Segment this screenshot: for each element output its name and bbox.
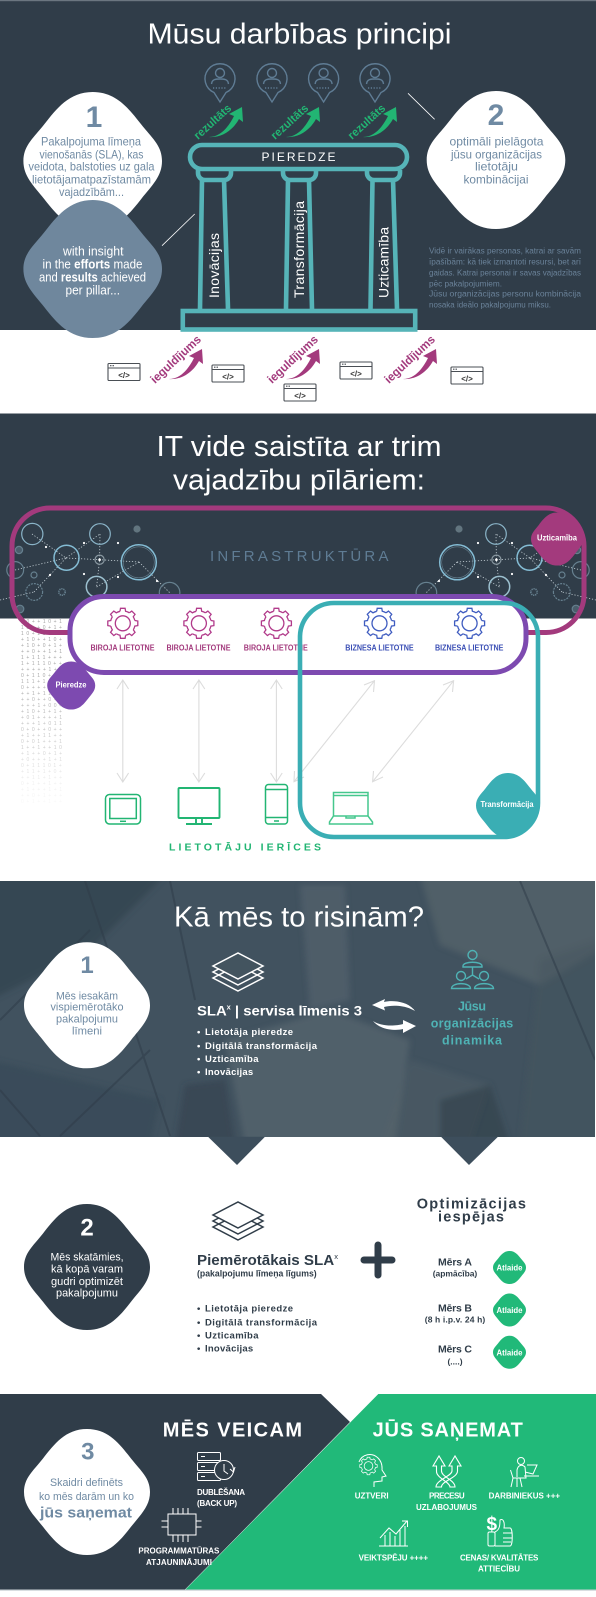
icon: thumbs up and dollar: $ bbox=[486, 1514, 498, 1535]
measures list bbox=[425, 1257, 485, 1366]
icons: code windows: </> bbox=[294, 392, 306, 400]
list: service level: Uzticamība bbox=[205, 1054, 259, 1065]
badge: Transformācija: Transformācija bbox=[480, 800, 534, 809]
icons: code windows: </> bbox=[461, 374, 473, 384]
binary digits: 0 + + + + 1 + + bbox=[21, 685, 63, 691]
measures list: (....) bbox=[447, 1356, 463, 1366]
icon: thumbs up and dollar bbox=[486, 1514, 512, 1546]
gear icons and labels: BIROJA LIETOTNE bbox=[244, 644, 308, 653]
capitals bbox=[198, 170, 400, 180]
discount badges: Atlaide bbox=[496, 1306, 523, 1315]
list: best-fit SLA: Lietotāja pieredze bbox=[205, 1304, 294, 1315]
binary digits: 1 + 1 1 1 0 + + bbox=[21, 661, 62, 667]
investment arrows: ieguldījums bbox=[147, 332, 204, 386]
text block: personas: Jūsu organizācijas personu kombinācija bbox=[429, 289, 582, 298]
title: Mūsu darbības principi: Mūsu darbības principi bbox=[148, 18, 452, 50]
badge: Pieredze bbox=[47, 662, 95, 710]
bubble step 2: 2 bbox=[80, 1215, 94, 1242]
icons: code windows: </> bbox=[118, 371, 130, 380]
icon: layers dark bbox=[213, 1202, 263, 1240]
bubble step 3: ko mēs darām un ko bbox=[39, 1491, 134, 1503]
binary digits: + + 1 + 1 1 + + bbox=[21, 691, 63, 697]
binary digits: 0 + 0 + + 0 + + bbox=[21, 727, 63, 733]
bubble step 1 bbox=[24, 942, 150, 1068]
list: best-fit SLA: Uzticamība bbox=[205, 1331, 259, 1342]
label: process improvements bbox=[416, 1492, 478, 1512]
list: best-fit SLA: • bbox=[197, 1344, 201, 1355]
phone bbox=[266, 784, 288, 824]
heading: MĒS VEICAM: MĒS VEICAM bbox=[163, 1420, 302, 1442]
base bbox=[183, 311, 415, 330]
network decoration left bbox=[0, 523, 180, 613]
bubble: with insight bbox=[23, 200, 162, 338]
binary digits: 1 0 + 1 1 + 1 1 bbox=[21, 631, 62, 637]
label: software updates: PROGRAMMATŪRAS bbox=[138, 1546, 220, 1555]
badge: Transformācija bbox=[476, 773, 540, 838]
label: software updates bbox=[138, 1546, 220, 1567]
list: service level: Digitālā transformācija bbox=[205, 1041, 318, 1052]
bubble: with insight: and results achieved bbox=[39, 271, 146, 285]
list: best-fit SLA: • bbox=[197, 1304, 201, 1315]
frame: transformation bbox=[300, 603, 538, 837]
binary digits: 0 + 1 + + 1 + + bbox=[21, 799, 63, 805]
measures list: Mērs A bbox=[438, 1257, 472, 1269]
bubble: with insight: in the efforts made bbox=[42, 258, 143, 272]
icon: plus bbox=[364, 1245, 392, 1275]
binary digits: + 1 0 + + 1 0 + bbox=[21, 637, 63, 643]
binary digits: 0 + 1 + + 1 + + bbox=[21, 781, 63, 787]
label: employees: DARBINIEKUS +++ bbox=[489, 1492, 560, 1501]
icons: code windows: </> bbox=[350, 370, 362, 378]
badge: Uzticamība bbox=[531, 512, 583, 566]
label: PIEREDZE: PIEREDZE bbox=[262, 150, 336, 164]
white line from pillar bbox=[162, 214, 195, 246]
icon: backup server bbox=[198, 1452, 235, 1480]
binary digits: + 1 + + + 1 + 1 bbox=[21, 787, 63, 793]
temple diagram bbox=[183, 145, 415, 330]
gear icons and labels bbox=[90, 608, 504, 653]
heading: Kā mēs to risinām: Kā mēs to risinām? bbox=[174, 902, 424, 934]
investment arrows: ieguldījums bbox=[264, 332, 321, 386]
subheading: service level agreement: (pakalpojumu līmeņa līgums) bbox=[197, 1269, 317, 1279]
icon: layers white bbox=[213, 953, 263, 991]
heading: SLA service level: | servisa līmenis 3 bbox=[231, 1003, 362, 1019]
text: your organisation dynamics bbox=[431, 1000, 513, 1047]
binary digits: 1 + 1 1 1 + + + bbox=[21, 655, 63, 661]
frame: applications bbox=[70, 596, 526, 672]
triangle left bbox=[208, 1137, 265, 1165]
bubble step 2: kā kopā varam bbox=[51, 1264, 123, 1276]
triangle right bbox=[441, 1137, 498, 1165]
heading: optimisation options: iespējas bbox=[438, 1210, 504, 1226]
list: best-fit SLA: • bbox=[197, 1331, 201, 1342]
heading: IT vide: vajadzību pīlāriem: bbox=[173, 464, 425, 496]
measures list: Mērs C bbox=[438, 1344, 472, 1356]
list: service level: • bbox=[197, 1027, 201, 1038]
bubble 1 bbox=[23, 92, 162, 230]
label: software updates: ATJAUNINĀJUMI bbox=[146, 1558, 212, 1567]
label: backup: DUBLĒŠANA bbox=[197, 1488, 245, 1497]
binary digits: + 1 0 + 0 + 1 + bbox=[21, 643, 63, 649]
bubble: with insight: with insight bbox=[62, 245, 124, 259]
bubble step 2: Mēs skatāmies, bbox=[50, 1252, 124, 1264]
bubble 1: vienošanās (SLA), kas bbox=[40, 147, 144, 161]
label: price quality ratio: ATTIECĪBU bbox=[478, 1565, 520, 1574]
binary digits: 1 + + 1 + + 1 0 bbox=[21, 745, 63, 751]
binary digits: + + + 1 + 0 0 + bbox=[21, 703, 63, 709]
text: your organisation dynamics: Jūsu bbox=[458, 1000, 486, 1014]
list: service level: Inovācijas bbox=[205, 1067, 254, 1078]
binary digits: + + + 1 + 0 1 1 bbox=[21, 721, 63, 727]
list: service level: • bbox=[197, 1067, 201, 1078]
label: price quality ratio: CENAS/ KVALITĀTES bbox=[460, 1554, 539, 1563]
investment arrows bbox=[147, 332, 438, 386]
heading: best-fit SLA: x bbox=[334, 1252, 338, 1261]
connection arrows bbox=[117, 680, 454, 782]
bubble 1: 1 bbox=[86, 101, 102, 134]
label: LIETOTĀJU IERĪCES: LIETOTĀJU IERĪCES bbox=[169, 842, 321, 854]
label: INFRASTRUKTŪRA: INFRASTRUKTŪRA bbox=[210, 548, 388, 565]
binary digits: 0 + 0 1 + + + 1 bbox=[21, 739, 63, 745]
bubble step 3: jūs saņemat bbox=[39, 1505, 132, 1522]
list: service level bbox=[197, 1027, 318, 1078]
binary digits: 0 + 1 1 1 0 1 + bbox=[21, 763, 62, 769]
measures list: Mērs B bbox=[438, 1303, 472, 1315]
label: price quality ratio bbox=[460, 1554, 539, 1574]
binary digits: + 0 + + 1 0 + 1 bbox=[21, 619, 63, 625]
heading: JŪS SAŅEMAT: JŪS SAŅEMAT bbox=[373, 1420, 523, 1442]
text block: personas: pēc pakalpojumiem. bbox=[429, 279, 502, 288]
heading: optimisation options bbox=[417, 1196, 526, 1226]
monitor bbox=[178, 788, 220, 824]
measures list: (apmācība) bbox=[433, 1269, 477, 1279]
label: process improvements: UZLABOJUMUS bbox=[416, 1503, 478, 1512]
label: backup bbox=[197, 1488, 245, 1508]
list: best-fit SLA: • bbox=[197, 1318, 201, 1329]
list: service level: • bbox=[197, 1041, 201, 1052]
panel: we do bbox=[0, 1394, 350, 1590]
bubble 1: lietotājamatpazīstamām bbox=[32, 172, 151, 186]
heading: SLA service level: x bbox=[227, 1005, 231, 1012]
bubble 2: optimāli pielāgota bbox=[450, 135, 544, 149]
results arrows bbox=[192, 103, 397, 142]
bubble step 1: 1 bbox=[80, 952, 94, 979]
bubble step 2 bbox=[24, 1204, 150, 1330]
list: best-fit SLA bbox=[197, 1304, 318, 1355]
results arrows: rezultāts bbox=[346, 103, 388, 142]
heading: IT vide bbox=[156, 431, 442, 496]
heading: SLA service level: SLA bbox=[197, 1003, 225, 1019]
binary digits: + 1 1 + 1 + 0 + bbox=[21, 769, 63, 775]
discount badges: Atlaide bbox=[496, 1348, 523, 1357]
bubble: with insight: per pillar... bbox=[66, 284, 120, 298]
bubble 2: lietotāju bbox=[475, 160, 518, 174]
binary digits: + 1 + + 1 1 + + bbox=[21, 733, 63, 739]
bottom rule bbox=[0, 1590, 596, 1591]
heading: best-fit SLA: Piemērotākais SLA bbox=[197, 1252, 333, 1269]
gear icons and labels: BIZNESA LIETOTNE bbox=[345, 644, 414, 653]
discount badges: Atlaide bbox=[496, 1264, 523, 1272]
network decoration right bbox=[416, 523, 596, 613]
heading: IT vide: IT vide saistīta ar trim bbox=[156, 431, 442, 463]
frame: infrastructure bbox=[12, 508, 584, 632]
list: best-fit SLA: Digitālā transformācija bbox=[205, 1318, 318, 1329]
binary digits: 0 + 1 1 0 + 1 + bbox=[21, 673, 62, 679]
icon: swap arrows bbox=[372, 999, 416, 1033]
icon: organisation people bbox=[452, 950, 494, 988]
bubble step 1: vispiemērotāko bbox=[50, 1002, 124, 1014]
icons: code windows bbox=[108, 362, 483, 401]
bubble 2 bbox=[427, 91, 565, 229]
label: Uzticamība: Uzticamība bbox=[376, 227, 392, 298]
section: IT environment background bbox=[0, 414, 596, 618]
binary digits: 1 1 1 + 1 + + 1 bbox=[21, 679, 62, 685]
icon: head with gear bbox=[359, 1455, 386, 1487]
binary digits bbox=[21, 619, 63, 805]
discount badges bbox=[493, 1251, 526, 1369]
icon: person at desk bbox=[510, 1458, 539, 1487]
binary digits: + 0 + + + 1 + 1 bbox=[21, 757, 63, 763]
laptop bbox=[330, 792, 372, 824]
binary digits: + 1 + + 0 + 1 + bbox=[21, 751, 63, 757]
investment arrows: ieguldījums bbox=[381, 332, 438, 386]
bubble 2: jūsu organizācijas bbox=[450, 147, 542, 161]
results arrows: rezultāts bbox=[269, 103, 311, 142]
label: performance: VEIKTSPĒJU ++++ bbox=[359, 1554, 428, 1563]
text: your organisation dynamics: dinamika bbox=[442, 1033, 503, 1047]
bubble step 3: 3 bbox=[81, 1438, 94, 1465]
bubble step 3 bbox=[24, 1429, 150, 1555]
text block: personas: gaidas. Katrai personai ir savas vajadzības bbox=[429, 268, 581, 277]
label: UZTVERI: UZTVERI bbox=[355, 1492, 389, 1501]
binary digits: 1 0 + + 0 + 1 + bbox=[21, 625, 63, 631]
section: how we solve background photo bbox=[0, 870, 596, 1145]
bubble step 3: Skaidri definēts bbox=[50, 1477, 123, 1489]
list: best-fit SLA: Inovācijas bbox=[205, 1344, 254, 1355]
badge: Uzticamība: Uzticamība bbox=[537, 534, 578, 542]
binary digits: + + + + + 1 + + bbox=[21, 667, 63, 673]
icon: chip bbox=[162, 1508, 202, 1542]
label: Inovācijas: Inovācijas bbox=[206, 233, 222, 298]
text block: personas: īpašībām: kā tiek izmantoti resursi, bet arī bbox=[429, 257, 582, 266]
binary digits: + 0 1 + + + + 1 bbox=[21, 715, 63, 721]
panel: you get bbox=[186, 1394, 596, 1590]
section: principles background bbox=[0, 0, 596, 330]
binary digits: + + 0 + + 1 + 1 bbox=[21, 649, 63, 655]
bubble 2: 2 bbox=[488, 99, 504, 132]
white line to bubble 2 bbox=[408, 93, 435, 119]
label: Transformācija: Transformācija bbox=[291, 201, 307, 298]
icon: process arrows bbox=[433, 1456, 461, 1487]
bubble step 1: Mēs iesakām bbox=[56, 990, 118, 1002]
list: service level: Lietotāja pieredze bbox=[205, 1027, 294, 1038]
capsule top bbox=[190, 145, 407, 169]
icons: code windows: </> bbox=[222, 372, 234, 382]
bubble step 2: gudri optimizēt bbox=[51, 1276, 123, 1288]
gear icons and labels: BIZNESA LIETOTNE bbox=[435, 644, 504, 653]
results arrows: rezultāts bbox=[192, 103, 234, 142]
bubble step 2: pakalpojumu bbox=[56, 1288, 118, 1300]
columns bbox=[200, 180, 397, 309]
gear icons and labels: BIROJA LIETOTNE bbox=[166, 644, 231, 653]
bubble step 1: pakalpojumu bbox=[56, 1014, 118, 1026]
binary digits: + + 0 + + 0 + 1 bbox=[21, 697, 63, 703]
label: process improvements: PRECESU bbox=[429, 1492, 465, 1501]
text block: personas bbox=[429, 246, 582, 309]
binary digits: + + 0 + 1 + + + bbox=[21, 793, 63, 799]
bubble 1: Pakalpojuma līmeņa bbox=[41, 135, 141, 149]
bubble 1: vajadzībām... bbox=[59, 185, 124, 199]
text block: personas: Vidē ir vairākas personas, katrai ar savām bbox=[429, 246, 581, 255]
icons: user devices bbox=[106, 784, 372, 824]
text: your organisation dynamics: organizācijas bbox=[431, 1017, 513, 1031]
icon: growth chart bbox=[379, 1521, 408, 1546]
label: backup: (BACK UP) bbox=[197, 1499, 237, 1508]
list: service level: • bbox=[197, 1054, 201, 1065]
gear icons and labels: BIROJA LIETOTNE bbox=[90, 644, 155, 653]
binary digits: + + 1 1 + 1 + + bbox=[21, 775, 63, 781]
bubble 2: kombinācijai bbox=[464, 172, 528, 186]
measures list: (8 h i.p.v. 24 h) bbox=[425, 1315, 485, 1325]
tablet bbox=[106, 794, 140, 824]
bubble 1: veidota, balstoties uz gala bbox=[28, 160, 155, 174]
text block: personas: nosaka ideālo pakalpojumu miksu. bbox=[429, 300, 551, 309]
icons: user pins bbox=[205, 64, 390, 102]
bubble step 1: līmeni bbox=[72, 1025, 102, 1037]
binary digits: + 1 0 + 1 + 1 + bbox=[21, 709, 63, 715]
heading: optimisation options: Optimizācijas bbox=[417, 1196, 526, 1212]
badge: Pieredze: Pieredze bbox=[56, 681, 87, 690]
